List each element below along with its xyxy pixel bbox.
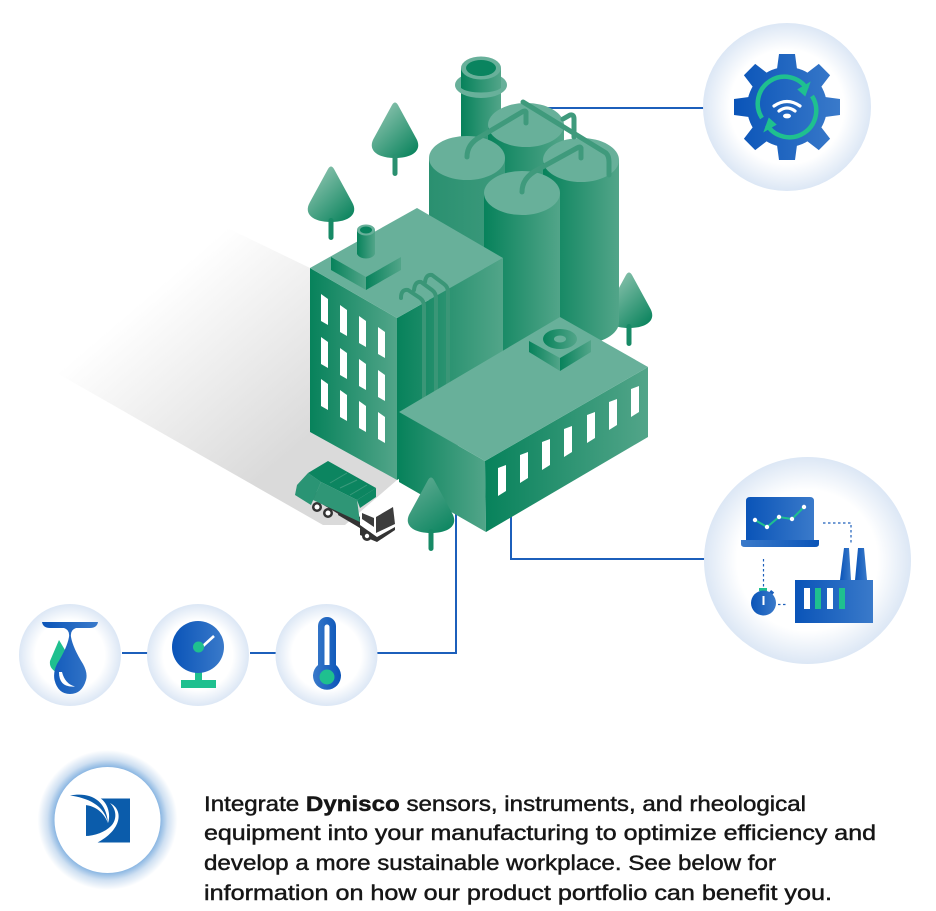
icon: drop: [42, 622, 98, 694]
tree: left: [308, 166, 354, 240]
logo badge: [38, 750, 178, 890]
icon: stopwatch: [751, 588, 776, 616]
text block: develop a more sustainable workplace. See below for: [204, 852, 776, 875]
silo: left: [429, 136, 505, 358]
left face: [310, 268, 397, 480]
icon: gear with wifi: [734, 54, 840, 160]
rooftop small chimney: [357, 230, 375, 258]
silos: [429, 102, 619, 373]
circle: connectivity: [703, 23, 871, 191]
icon: factory: [795, 548, 873, 623]
windows: [321, 294, 385, 443]
silo pipes: [467, 102, 609, 192]
rooftop vent base: [331, 257, 366, 290]
roof vent: [529, 341, 560, 371]
windows: [498, 386, 639, 496]
circle: pressure: [147, 604, 249, 706]
icon: gauge: [172, 621, 224, 688]
tree: top: [372, 102, 418, 176]
connector lines: [122, 108, 706, 653]
text block: Integrate Dynisco sensors, instruments, and rheological: [204, 793, 806, 816]
left face: [399, 412, 486, 532]
text block: equipment into your manufacturing to optimize efficiency and: [204, 822, 876, 845]
icon: laptop chart: [741, 497, 819, 547]
text block: [204, 793, 876, 905]
truck cab: [360, 504, 396, 542]
circle: process monitoring: [704, 457, 911, 664]
tree: front: [408, 478, 454, 551]
silo: back: [488, 103, 564, 275]
right face: [485, 367, 648, 532]
roof: [399, 317, 648, 461]
dotted links: [764, 523, 851, 604]
building: tall block: [310, 208, 503, 480]
right face: [397, 258, 503, 480]
shadow of factory: [55, 222, 397, 525]
circle: viscosity: [19, 604, 121, 706]
wall pipes: [401, 275, 448, 415]
truck: [295, 461, 396, 542]
icon: Dynisco mark: [70, 795, 130, 843]
text block: information on how our product portfolio can benefit you.: [204, 882, 832, 905]
building: low block: [399, 317, 648, 532]
silo: front: [484, 171, 560, 373]
chimney: [455, 56, 507, 150]
roof: [310, 208, 503, 318]
silo: right: [543, 138, 619, 344]
tree: right: [606, 272, 652, 346]
icon: thermometer: [313, 617, 341, 690]
circle: temperature: [276, 604, 378, 706]
